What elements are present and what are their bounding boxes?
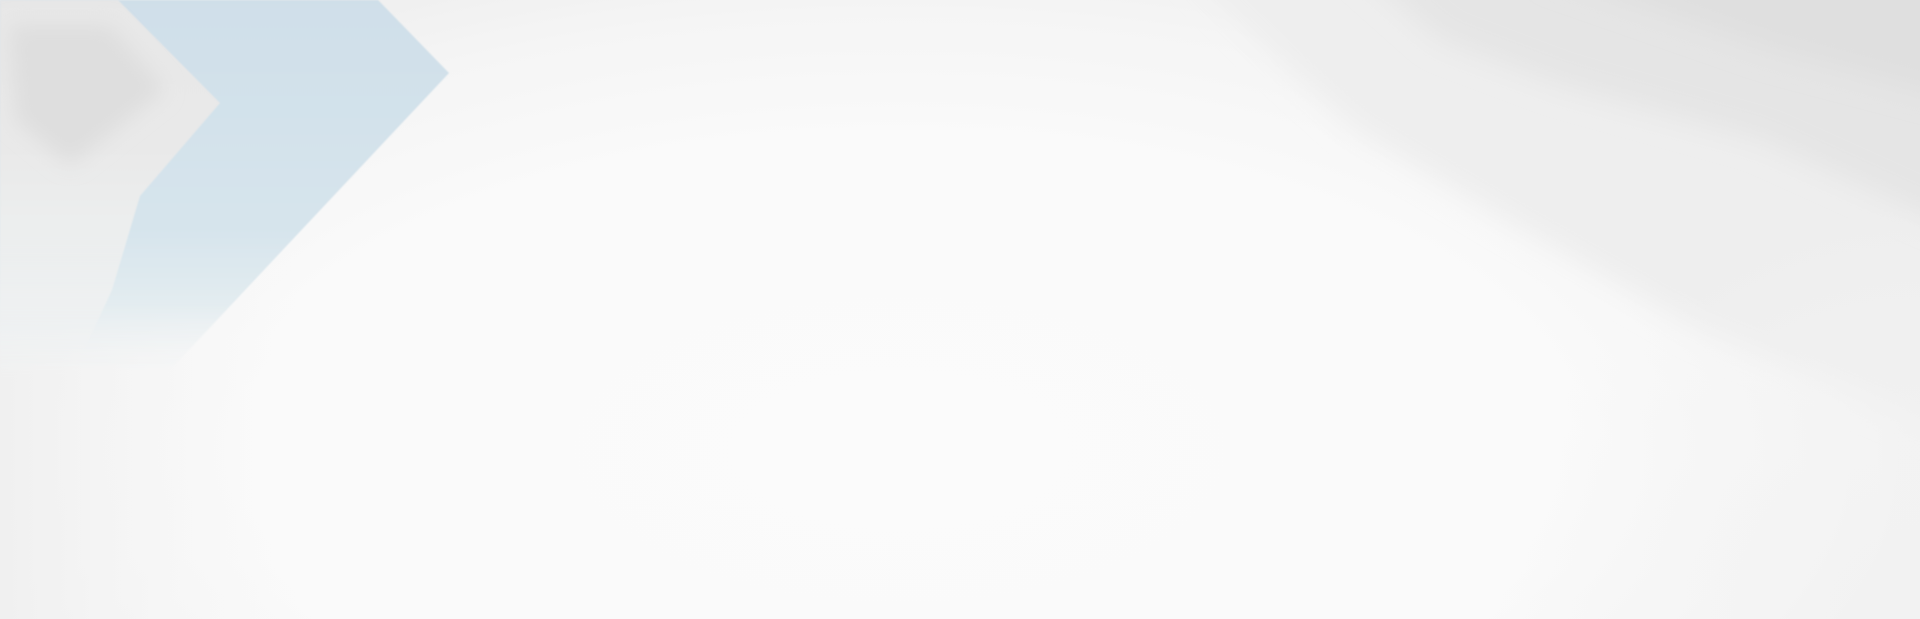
inner dark gray chevron: [10, 25, 165, 165]
top-right gray bands: [1350, 0, 1920, 301]
bottom-right light shading: [1500, 199, 1920, 619]
gray chevron: [0, 0, 220, 312]
blue chevron: [96, 0, 449, 336]
left edge shading: [0, 0, 300, 619]
